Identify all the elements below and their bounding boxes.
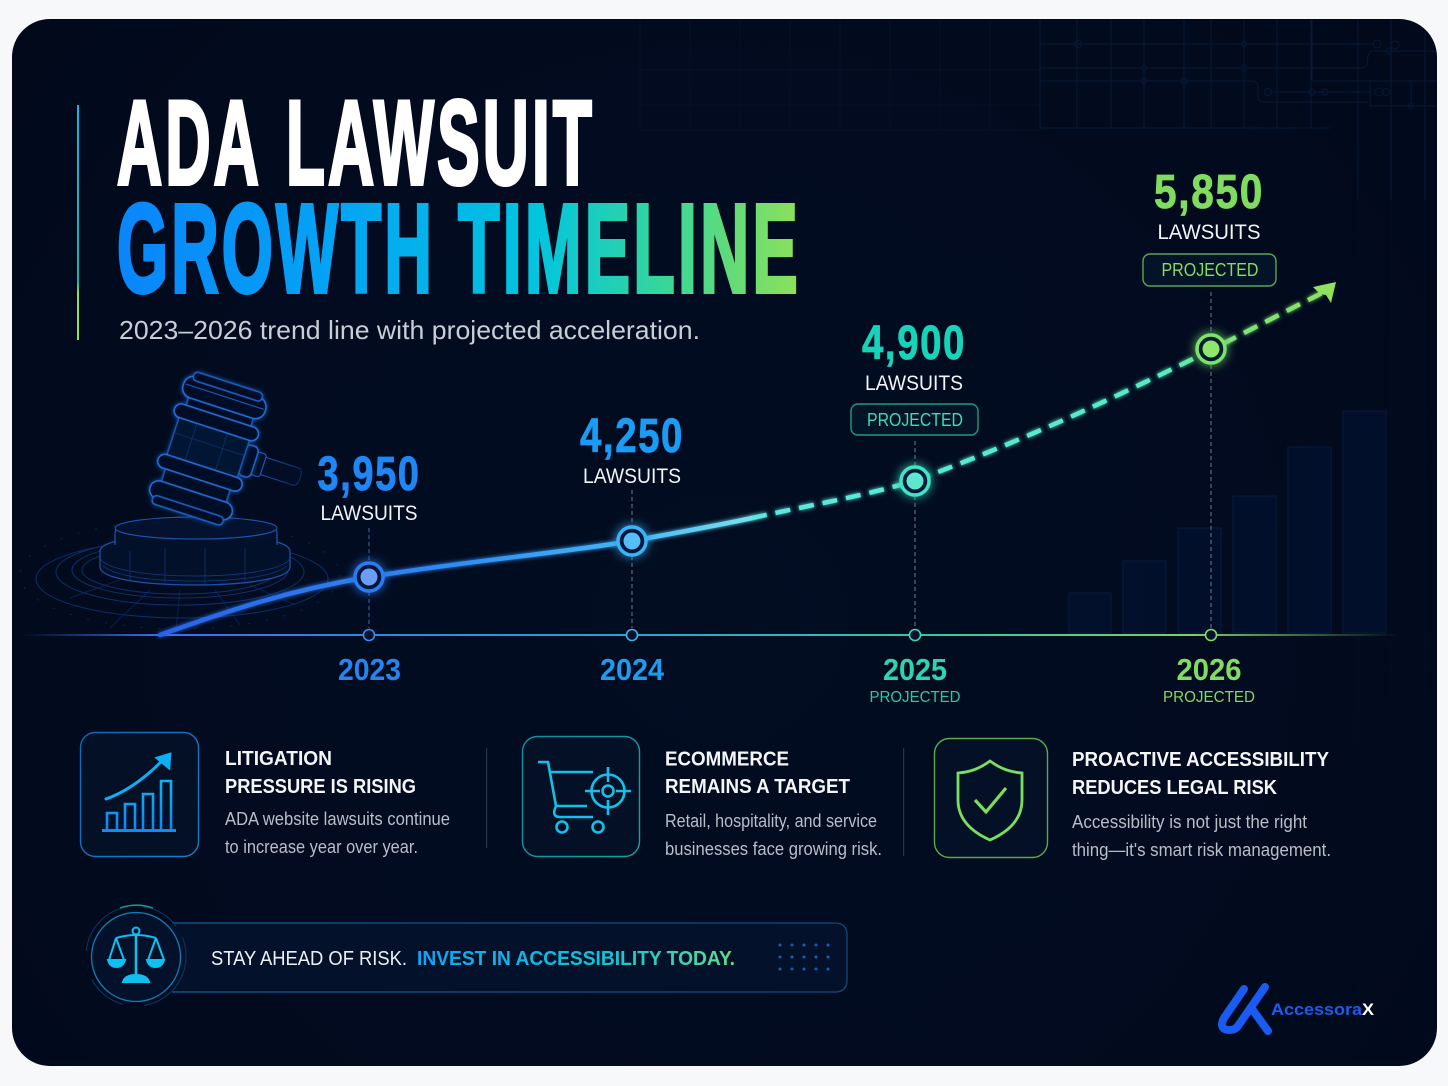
data node 2025 bbox=[901, 467, 929, 495]
text: ecommerce target: ECOMMERCE bbox=[665, 748, 789, 770]
divider bbox=[903, 748, 904, 856]
text: litigation pressure: LITIGATION bbox=[225, 748, 332, 770]
text: proactive accessibility: thing—it's smart risk management. bbox=[1072, 840, 1331, 860]
data label 2026: LAWSUITS bbox=[1158, 221, 1260, 244]
data label 2025: LAWSUITS bbox=[865, 372, 963, 395]
data node 2026 bbox=[1197, 335, 1225, 363]
text: proactive accessibility: REDUCES LEGAL RISK bbox=[1072, 777, 1278, 799]
title: ADA bbox=[117, 76, 262, 210]
background bars bbox=[1069, 411, 1386, 633]
gavel handle bbox=[237, 444, 305, 493]
axis tick markers bbox=[364, 630, 1216, 640]
gavel head bbox=[145, 369, 271, 528]
data node 2024 bbox=[618, 527, 646, 555]
text: ecommerce target: businesses face growing risk. bbox=[665, 839, 882, 859]
call to action bar bbox=[172, 923, 847, 992]
data label 2025 bbox=[851, 317, 978, 435]
year labels: 2023 bbox=[338, 652, 401, 687]
dashed drop lines bbox=[369, 292, 1211, 628]
background: circuit pattern bbox=[640, 20, 1437, 1000]
year labels: 2024 bbox=[600, 652, 665, 687]
icon: gavel on sound block bbox=[20, 369, 340, 630]
data label 2026: PROJECTED bbox=[1162, 260, 1258, 280]
logo: AccessoraX: Accessora bbox=[1271, 1000, 1363, 1019]
logo: AccessoraX: X bbox=[1362, 1000, 1375, 1019]
title: TIMELINE bbox=[458, 178, 801, 319]
call to action bar: INVEST IN ACCESSIBILITY TODAY. bbox=[417, 948, 735, 970]
title: GROWTH bbox=[117, 178, 435, 319]
icon: rising bar chart bbox=[80, 732, 198, 856]
data label 2024: 4,250 bbox=[580, 410, 684, 463]
data label 2024 bbox=[580, 410, 684, 488]
logo: AccessoraX bbox=[1222, 987, 1375, 1031]
text: litigation pressure: ADA website lawsuits continue bbox=[225, 809, 450, 829]
data label 2024: LAWSUITS bbox=[583, 465, 681, 488]
title: LAWSUIT bbox=[286, 76, 595, 210]
data node 2023 bbox=[355, 563, 383, 591]
call to action bar: STAY AHEAD OF RISK. bbox=[211, 948, 407, 970]
text: proactive accessibility bbox=[1072, 749, 1331, 860]
data label 2025: 4,900 bbox=[862, 317, 966, 370]
icon: scales of justice bbox=[86, 905, 186, 1006]
text: proactive accessibility: Accessibility is not just the right bbox=[1072, 812, 1307, 832]
data label 2026: 5,850 bbox=[1154, 166, 1264, 219]
data label 2025: PROJECTED bbox=[867, 410, 963, 430]
text: litigation pressure: to increase year over year. bbox=[225, 837, 418, 857]
data label 2023 bbox=[318, 448, 420, 525]
timeline axis bbox=[20, 634, 1400, 636]
title accent bar bbox=[77, 105, 79, 340]
trend line: actual bbox=[160, 518, 752, 635]
data label 2026 bbox=[1143, 166, 1276, 286]
arrow head bbox=[1313, 282, 1336, 303]
data label 2023: 3,950 bbox=[318, 448, 420, 501]
text: ecommerce target: Retail, hospitality, and service bbox=[665, 811, 877, 831]
subtitle: 2023–2026 trend line with projected acceleration. bbox=[119, 315, 700, 345]
icon: shopping cart with target bbox=[522, 736, 640, 856]
year labels: 2026 bbox=[1176, 652, 1242, 687]
icon: shield with check bbox=[934, 738, 1048, 858]
year labels: PROJECTED bbox=[870, 689, 960, 706]
text: litigation pressure: PRESSURE IS RISING bbox=[225, 776, 416, 798]
year labels bbox=[338, 652, 1255, 706]
text: ecommerce target bbox=[665, 748, 882, 859]
text: litigation pressure bbox=[225, 748, 450, 857]
year labels: 2025 bbox=[883, 652, 947, 687]
year labels: PROJECTED bbox=[1163, 689, 1255, 706]
text: proactive accessibility: PROACTIVE ACCESSIBILITY bbox=[1072, 749, 1330, 771]
text: ecommerce target: REMAINS A TARGET bbox=[665, 776, 850, 798]
trend line: projected dashed bbox=[752, 292, 1324, 518]
data label 2023: LAWSUITS bbox=[320, 502, 418, 525]
divider bbox=[486, 748, 487, 848]
title bbox=[117, 76, 801, 319]
